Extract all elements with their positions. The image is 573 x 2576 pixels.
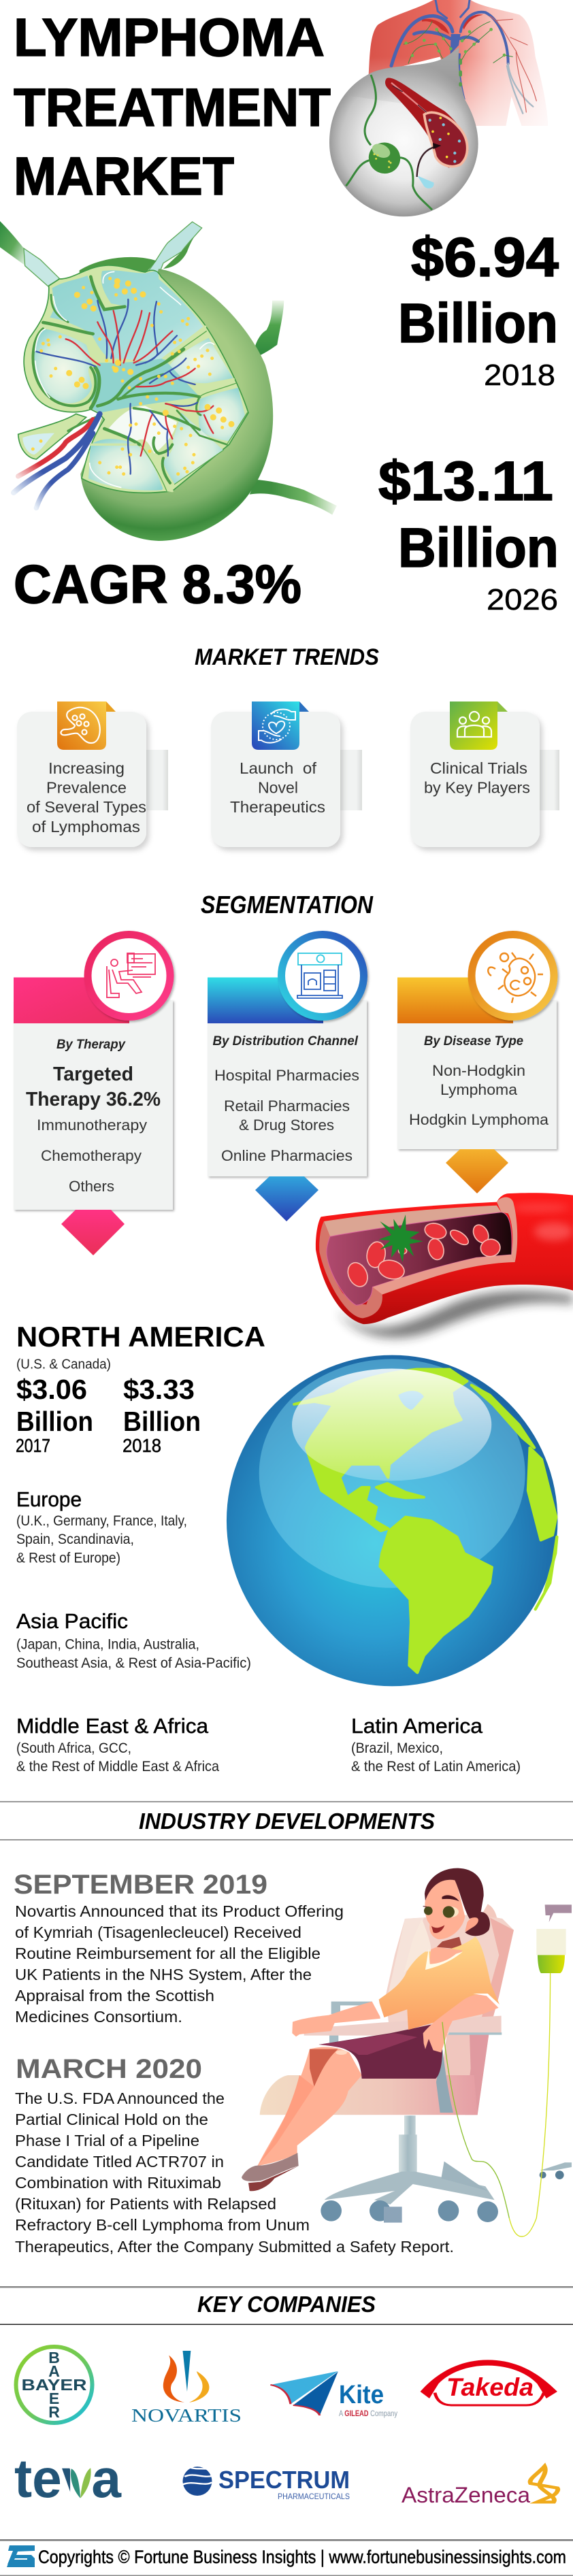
market size 2018: Billion bbox=[398, 293, 558, 354]
text: Online Pharmacies bbox=[221, 1147, 353, 1164]
icon: pharmacy badge bbox=[278, 931, 367, 1021]
region: europe: Spain, Scandinavia, bbox=[16, 1532, 134, 1547]
interior body bbox=[24, 265, 248, 493]
logo: novartis: NOVARTIS bbox=[131, 2405, 242, 2426]
region: europe: (U.K., Germany, France, Italy, bbox=[16, 1513, 187, 1529]
title: LYMPHOMA bbox=[14, 7, 325, 67]
region: asia pacific: Southeast Asia, & Rest of Asia-Pacific) bbox=[16, 1655, 251, 1671]
icon: hands and heart bbox=[259, 710, 295, 743]
text block: september 2019: SEPTEMBER 2019 bbox=[14, 1870, 267, 1900]
text: Novel bbox=[258, 778, 298, 796]
text: & Drug Stores bbox=[239, 1117, 334, 1134]
text block: march 2020: The U.S. FDA Announced the bbox=[15, 2090, 225, 2107]
text block: march 2020 bbox=[15, 2054, 454, 2256]
text bbox=[26, 1038, 161, 1195]
text: Targeted bbox=[53, 1063, 133, 1085]
IV bag and tubing bbox=[442, 1904, 572, 2236]
text: Clinical Trials bbox=[430, 759, 527, 777]
logo: spectrum: SPECTRUM bbox=[218, 2466, 350, 2494]
text: by Key Players bbox=[424, 778, 530, 796]
region: middle east and africa bbox=[16, 1714, 219, 1774]
text block: march 2020: Phase I Trial of a Pipeline bbox=[15, 2132, 199, 2149]
text: By Therapy bbox=[56, 1038, 126, 1052]
region: north america: (U.S. & Canada) bbox=[16, 1357, 111, 1372]
logo: bayer bbox=[16, 2347, 93, 2423]
region: north america: 2017 bbox=[16, 1435, 50, 1456]
text bbox=[27, 759, 146, 836]
text block: march 2020: Partial Clinical Hold on the bbox=[15, 2111, 208, 2128]
text block: march 2020: (Rituxan) for Patients with Relapsed bbox=[15, 2195, 276, 2213]
text: Therapeutics bbox=[230, 798, 325, 816]
region: asia pacific bbox=[16, 1609, 251, 1671]
region: north america: Billion bbox=[16, 1406, 93, 1437]
logo: bayer: B bbox=[48, 2349, 60, 2366]
icon: fortune business insights logo bbox=[7, 2545, 35, 2567]
region: north america: $3.06 bbox=[16, 1374, 87, 1405]
heading: market trends: MARKET TRENDS bbox=[195, 644, 379, 670]
icon: infusion patient badge bbox=[84, 931, 174, 1021]
icon: diamond bbox=[61, 1210, 125, 1255]
illustration: torso with lymph system and magnified vessel bbox=[329, 0, 548, 216]
text block: september 2019: Appraisal from the Scottish bbox=[15, 1987, 214, 2004]
market size 2026: 2026 bbox=[487, 583, 558, 616]
region: north america: $3.33 bbox=[123, 1374, 195, 1405]
market size 2018: 2018 bbox=[484, 359, 555, 392]
illustration: lymph node cross-section bbox=[0, 221, 337, 541]
logo: bayer: BAYER bbox=[22, 2376, 87, 2394]
illustration: blood vessel bbox=[316, 1193, 573, 1338]
logo: takeda bbox=[421, 2360, 557, 2405]
text block: september 2019: Routine Reimbursement for all the Eligible bbox=[15, 1945, 321, 1962]
logo: kite bbox=[270, 2371, 397, 2418]
heading: industry developments bbox=[0, 1802, 573, 1840]
market size 2018 bbox=[398, 227, 559, 392]
text block: september 2019 bbox=[14, 1870, 344, 2026]
logo: teva: teva bbox=[14, 2448, 121, 2509]
panel: by distribution channel bbox=[208, 931, 367, 1221]
region: latin america: & the Rest of Latin America) bbox=[351, 1759, 521, 1774]
virus bbox=[379, 1215, 423, 1262]
text bbox=[409, 1034, 549, 1128]
title: MARKET bbox=[14, 146, 234, 206]
text block: march 2020: MARCH 2020 bbox=[16, 2054, 202, 2084]
text: Prevalence bbox=[46, 778, 127, 796]
region: latin america: Latin America bbox=[351, 1714, 483, 1738]
text: Lymphoma bbox=[440, 1081, 518, 1098]
region: europe bbox=[16, 1487, 187, 1566]
illustration: patient on infusion chair bbox=[242, 1868, 572, 2236]
region: middle east and africa: (South Africa, GCC, bbox=[16, 1740, 131, 1756]
panel: novel therapeutics bbox=[211, 701, 362, 847]
market size 2026: Billion bbox=[398, 517, 559, 579]
text bbox=[230, 759, 325, 816]
panel: increasing prevalence bbox=[17, 701, 168, 847]
text: Non-Hodgkin bbox=[432, 1062, 525, 1079]
panel: clinical trials bbox=[410, 701, 559, 847]
red blood cells bbox=[344, 1221, 502, 1290]
chambers bbox=[22, 270, 245, 491]
region: north america: NORTH AMERICA bbox=[16, 1321, 265, 1353]
icon: people bbox=[457, 712, 491, 737]
region: north america: Billion bbox=[123, 1406, 201, 1437]
text block: march 2020: Therapeutics, After the Company Submitted a Safety Report. bbox=[15, 2238, 454, 2256]
market size 2026 bbox=[378, 450, 559, 616]
market size 2026: $13.11 bbox=[378, 450, 553, 512]
capsule bbox=[80, 269, 273, 541]
lymph vessels bbox=[0, 221, 337, 515]
logo: astrazeneca: AstraZeneca bbox=[402, 2483, 530, 2507]
panel: by disease type bbox=[397, 931, 558, 1193]
market size 2018: $6.94 bbox=[411, 227, 559, 288]
panel: by therapy bbox=[14, 931, 174, 1255]
logo: takeda: Takeda bbox=[446, 2373, 534, 2401]
text: Chemotherapy bbox=[41, 1147, 142, 1164]
title: TREATMENT bbox=[14, 77, 331, 137]
region: asia pacific: Asia Pacific bbox=[16, 1609, 128, 1633]
text: Retail Pharmacies bbox=[224, 1097, 350, 1114]
text bbox=[424, 759, 530, 796]
logo: bayer: R bbox=[48, 2403, 60, 2421]
hilum vessels bbox=[14, 414, 100, 508]
icon: lymph node bbox=[61, 708, 100, 743]
text bbox=[212, 1034, 359, 1164]
text: Hospital Pharmacies bbox=[214, 1067, 359, 1084]
illustration: globe bbox=[227, 1355, 557, 1686]
logo: novartis bbox=[131, 2351, 242, 2426]
text block: september 2019: Novartis Announced that its Product Offering bbox=[15, 1902, 344, 1920]
region: north america bbox=[16, 1321, 265, 1456]
text: Hodgkin Lymphoma bbox=[409, 1111, 549, 1128]
region: europe: & Rest of Europe) bbox=[16, 1550, 120, 1566]
text: Increasing bbox=[48, 759, 125, 777]
text: Immunotherapy bbox=[37, 1117, 147, 1134]
region: latin america: (Brazil, Mexico, bbox=[351, 1740, 443, 1756]
text block: march 2020: Combination with Rituximab bbox=[15, 2174, 221, 2192]
text: Therapy 36.2% bbox=[26, 1089, 161, 1110]
text block: march 2020: Refractory B-cell Lymphoma from Unum bbox=[15, 2216, 310, 2234]
region: europe: Europe bbox=[16, 1487, 82, 1511]
CAGR: CAGR 8.3% bbox=[14, 554, 301, 614]
text: Launch of bbox=[240, 759, 317, 777]
region: asia pacific: (Japan, China, India, Australia, bbox=[16, 1637, 199, 1652]
text block: september 2019: Medicines Consortium. bbox=[15, 2008, 182, 2026]
logo: spectrum: PHARMACEUTICALS bbox=[278, 2492, 350, 2501]
region: middle east and africa: & the Rest of Middle East & Africa bbox=[16, 1759, 219, 1774]
text block: march 2020: Candidate Titled ACTR707 in bbox=[15, 2153, 224, 2170]
logo: kite: A GILEAD Company bbox=[339, 2409, 397, 2418]
white highlights bbox=[35, 271, 214, 488]
logo: astrazeneca bbox=[402, 2466, 558, 2507]
icon: diamond bbox=[255, 1176, 318, 1221]
heading: segmentation: SEGMENTATION bbox=[201, 891, 374, 919]
footer bbox=[0, 2539, 573, 2576]
text: By Disease Type bbox=[424, 1034, 523, 1048]
logo: bayer: E bbox=[49, 2390, 59, 2407]
region: latin america bbox=[351, 1714, 521, 1774]
text: By Distribution Channel bbox=[212, 1034, 359, 1048]
icon: cell badge bbox=[468, 931, 558, 1021]
logo: bayer: A bbox=[48, 2362, 60, 2380]
text block: september 2019: of Kymriah (Tisagenlecleucel) Received bbox=[15, 1923, 301, 1941]
lymphocyte dots bbox=[69, 281, 231, 424]
region: north america: 2018 bbox=[122, 1435, 161, 1456]
text: of Lymphomas bbox=[32, 818, 140, 836]
heading: key companies: KEY COMPANIES bbox=[197, 2292, 376, 2317]
text: Others bbox=[69, 1178, 114, 1195]
text: of Several Types bbox=[27, 798, 146, 816]
region: middle east and africa: Middle East & Africa bbox=[16, 1714, 209, 1738]
chair bbox=[260, 1904, 514, 2223]
icon: diamond bbox=[446, 1149, 508, 1193]
logo: kite: Kite bbox=[339, 2381, 384, 2409]
woman bbox=[242, 1868, 502, 2191]
text block: september 2019: UK Patients in the NHS System, After the bbox=[15, 1966, 312, 1983]
blood vessels bbox=[36, 299, 213, 474]
title bbox=[14, 7, 331, 206]
heading: industry developments: INDUSTRY DEVELOPMENTS bbox=[139, 1809, 435, 1834]
septa and medullary cords bbox=[33, 277, 247, 491]
logo: spectrum bbox=[182, 2466, 350, 2501]
